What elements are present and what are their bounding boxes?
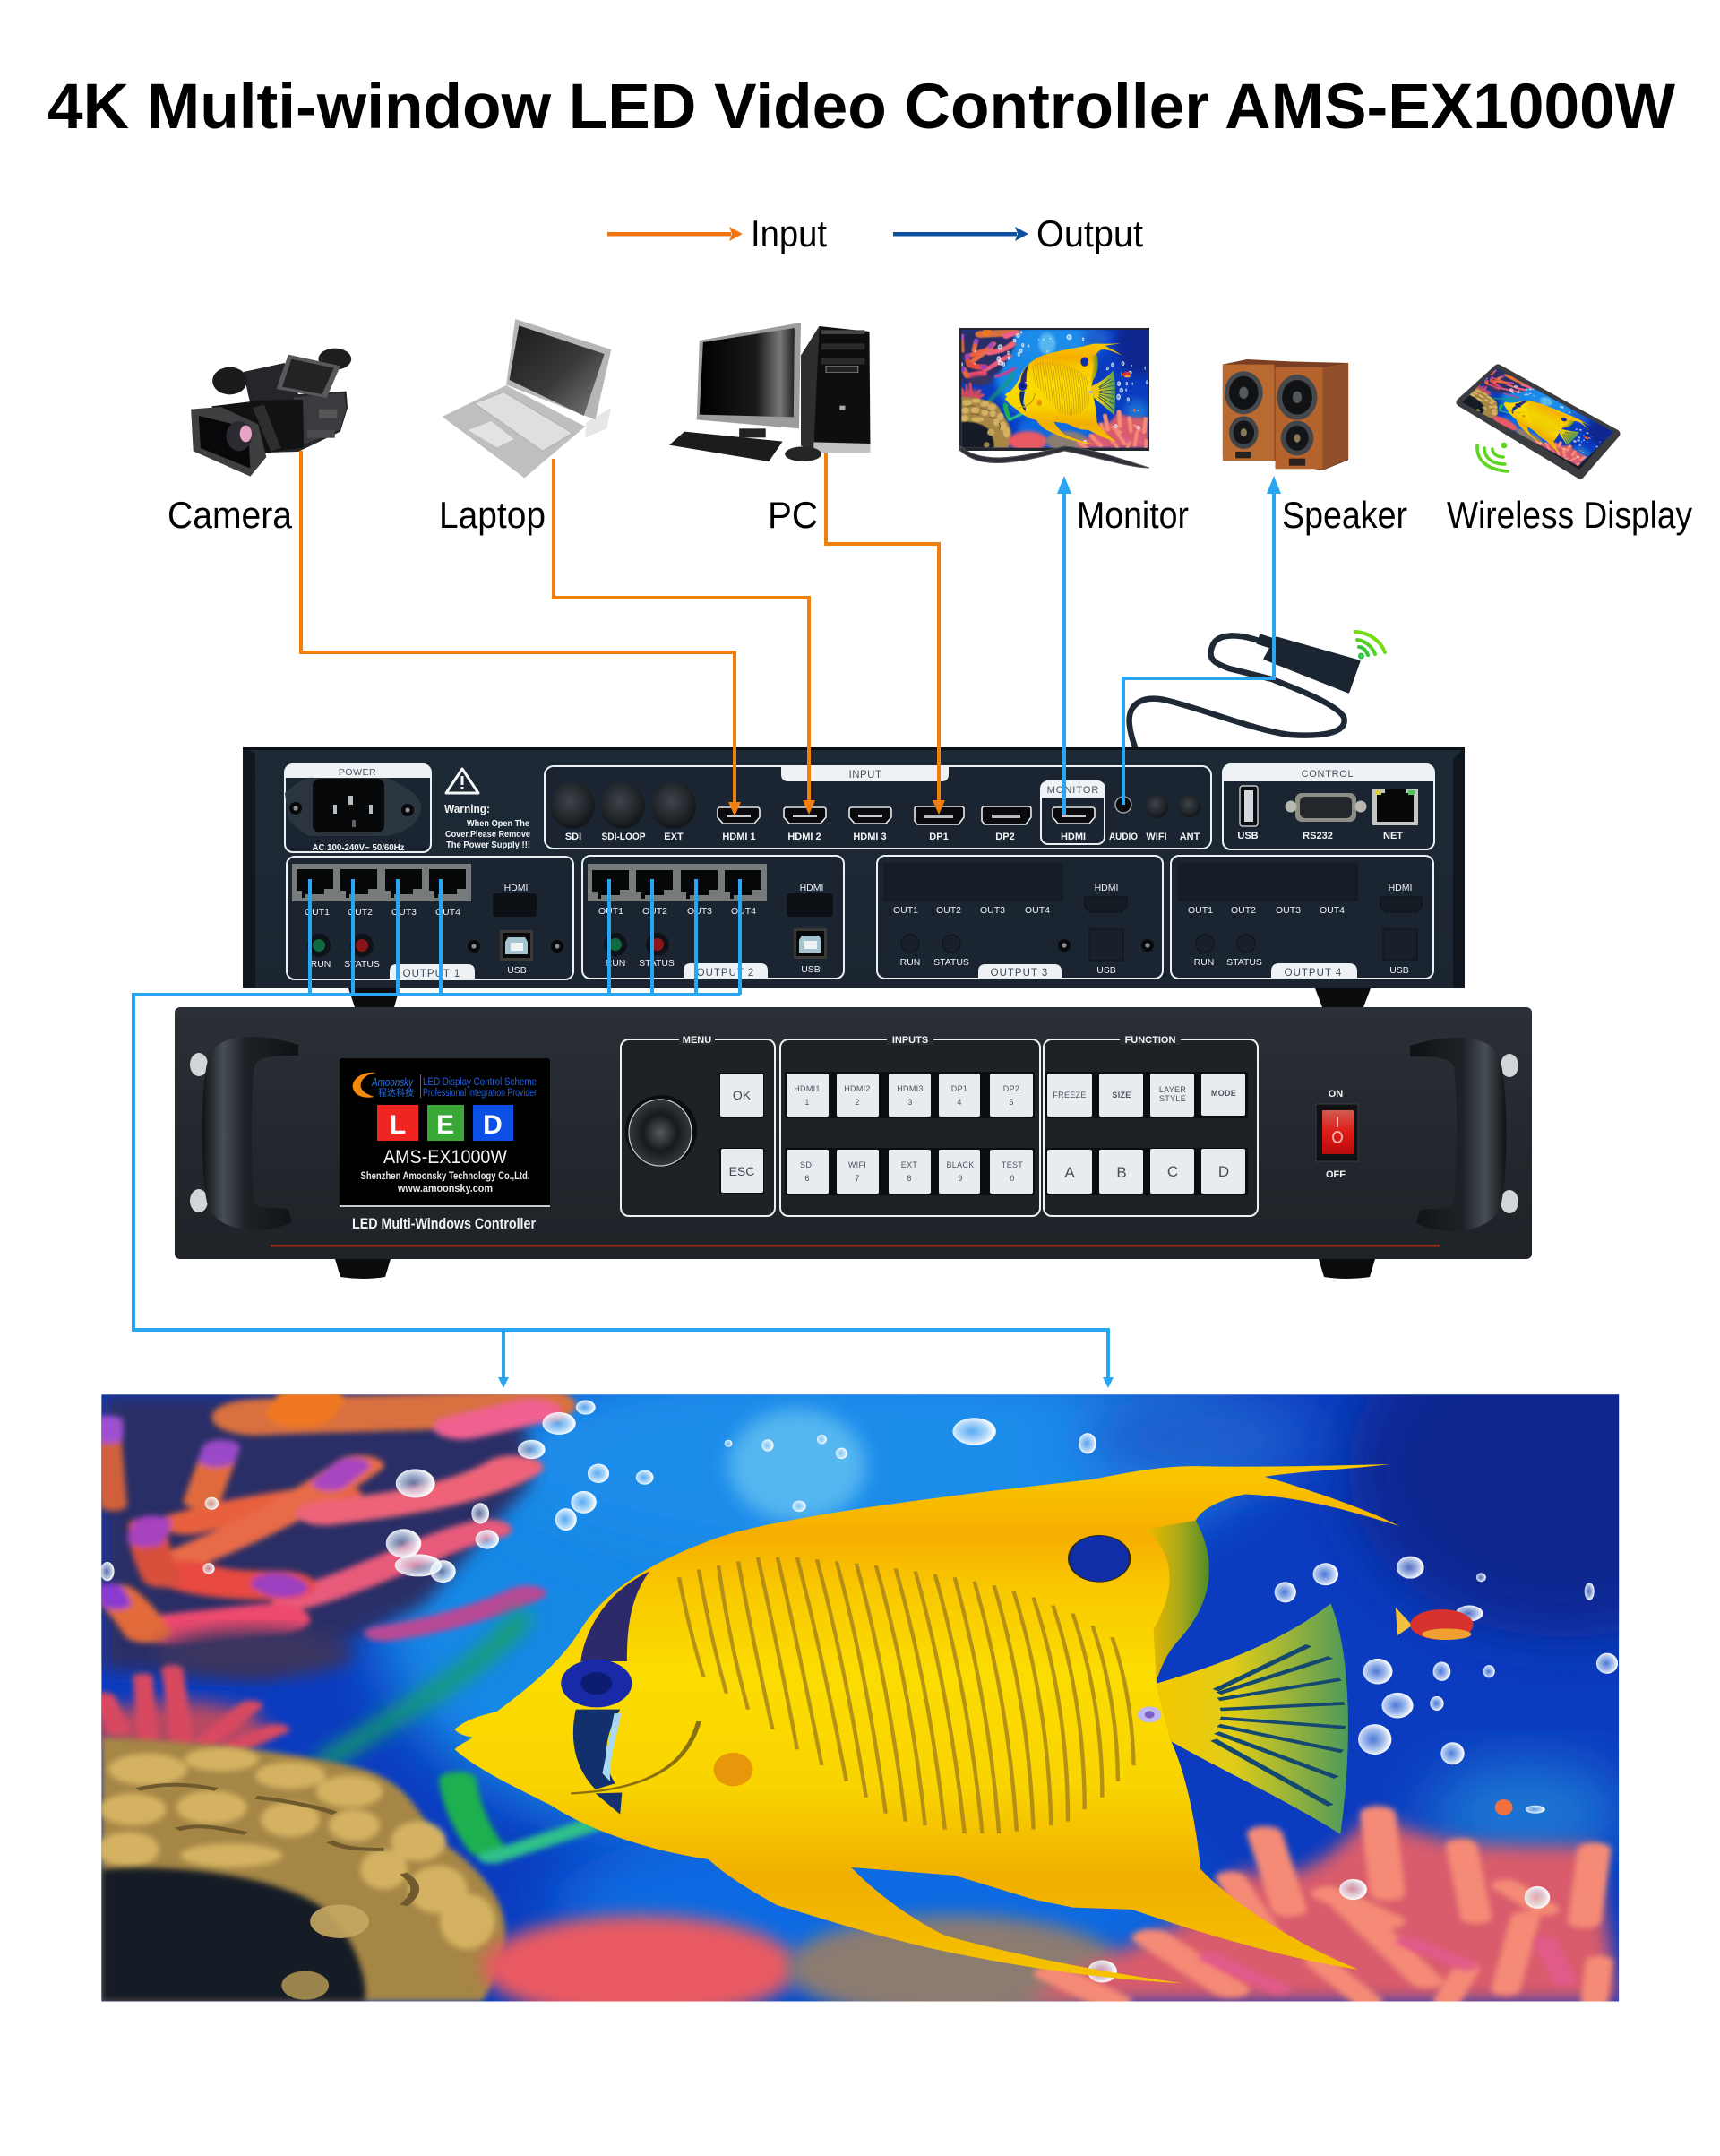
control knob xyxy=(625,1095,697,1167)
panel: input: DP2 xyxy=(995,832,1015,842)
LCD screen: Amoonsky xyxy=(371,1075,414,1089)
panel: inputs: 2 xyxy=(855,1098,860,1107)
power switch: ON xyxy=(1329,1089,1343,1100)
panel: output 4: HDMI xyxy=(1389,883,1412,893)
panel: menu xyxy=(621,1032,775,1216)
title: 4K Multi-window LED Video Controller AMS-EX1000W xyxy=(47,72,1675,142)
panel: output 2: OUT3 xyxy=(687,906,712,917)
rear panel of controller xyxy=(243,747,1465,1009)
green seaweed xyxy=(325,1617,596,1858)
panel: inputs: WIFI xyxy=(848,1160,866,1169)
warning triangle and text: Cover,Please Remove xyxy=(445,830,530,840)
panel: input: EXT xyxy=(664,832,684,842)
device labels xyxy=(168,494,1692,536)
panel: output 1: STATUS xyxy=(344,959,380,970)
LCD screen: Shenzhen Amoonsky Technology Co.,Ltd. xyxy=(360,1169,530,1182)
dorsal fin green edge xyxy=(1147,1521,1209,1681)
panel: output 2: USB xyxy=(801,964,821,975)
panel: input: ANT xyxy=(1180,832,1200,842)
panel: output 3: OUT3 xyxy=(980,905,1005,916)
panel: output 3: HDMI xyxy=(1095,883,1118,893)
panel: output 2: RUN xyxy=(606,958,625,969)
LED letter tiles: E xyxy=(436,1110,454,1140)
arrow: audio and wifi to speaker xyxy=(1123,476,1281,805)
panel: function: FREEZE xyxy=(1053,1091,1087,1100)
panel: power: POWER xyxy=(339,767,376,778)
arrows: output ports to LED wall xyxy=(133,879,1114,1388)
LCD screen: AMS-EX1000W xyxy=(383,1147,507,1168)
panel: inputs: SDI xyxy=(800,1160,814,1169)
label: PC: PC xyxy=(768,494,818,536)
panel: function: MODE xyxy=(1211,1089,1236,1098)
warning triangle and text: Warning: xyxy=(444,802,490,815)
panel: control: RS232 xyxy=(1303,831,1333,841)
arrow: laptop to HDMI 2 xyxy=(554,459,815,815)
panel: inputs: 0 xyxy=(1010,1174,1015,1183)
arrow: PC to DP1 xyxy=(826,453,945,815)
LED wall image: tropical fish scene xyxy=(101,1394,1620,2002)
label: laptop: Laptop xyxy=(439,494,546,536)
icon: PC xyxy=(669,323,871,461)
small red fish xyxy=(1396,1608,1474,1640)
panel: output 1: HDMI xyxy=(504,883,528,893)
panel: output 1: OUTPUT 1 xyxy=(403,969,460,979)
panel: inputs: INPUTS xyxy=(892,1035,928,1046)
panel: output 1 xyxy=(287,857,573,979)
front panel of controller xyxy=(175,1007,1532,1279)
panel: input xyxy=(545,766,1211,849)
LCD screen: www.amoonsky.com xyxy=(397,1184,493,1194)
LCD screen xyxy=(340,1058,550,1207)
panel: input: HDMI 2 xyxy=(787,832,821,842)
warning triangle and text: The Power Supply !!! xyxy=(446,841,530,850)
panel: output 3: OUT1 xyxy=(893,905,918,916)
icon: speakers xyxy=(1223,359,1348,470)
panel: output 3: OUT2 xyxy=(936,905,961,916)
panel: output 1: OUT4 xyxy=(435,907,460,918)
panel: power: AC 100-240V~ 50/60Hz xyxy=(312,842,405,853)
panel: output 3: RUN xyxy=(900,957,920,968)
label: monitor: Monitor xyxy=(1077,494,1189,536)
panel: function: C xyxy=(1167,1163,1178,1180)
feet of front unit xyxy=(335,1259,1375,1279)
coral upper left xyxy=(101,1394,531,1677)
panel: output 2: STATUS xyxy=(639,958,675,969)
panel: inputs: HDMI1 xyxy=(794,1084,821,1093)
panel: input: DP1 xyxy=(929,832,949,842)
icon: camera xyxy=(191,349,351,477)
LED letter tiles: L xyxy=(390,1110,406,1140)
coral bottom xyxy=(482,1814,1619,2020)
panel: function: SIZE xyxy=(1112,1091,1131,1100)
panel: inputs: HDMI3 xyxy=(897,1084,924,1093)
panel: output 1: RUN xyxy=(311,959,331,970)
panel: output 4: OUT3 xyxy=(1276,905,1301,916)
panel: output 4: OUT4 xyxy=(1320,905,1345,916)
legend: output label: Output xyxy=(1036,212,1143,254)
panel: inputs: 4 xyxy=(957,1098,962,1107)
panel: output 2: HDMI xyxy=(800,883,823,893)
panel: inputs: BLACK xyxy=(946,1160,975,1169)
legend: output arrow xyxy=(893,227,1028,241)
monitor sub-panel: MONITOR xyxy=(1047,785,1099,796)
monitor sub-panel xyxy=(1041,781,1105,844)
arrow: monitor HDMI to monitor xyxy=(1057,476,1071,815)
panel: inputs: 3 xyxy=(907,1098,913,1107)
LED letter tiles xyxy=(377,1105,513,1141)
panel: input: HDMI 1 xyxy=(722,832,756,842)
panel: output 4: USB xyxy=(1389,965,1409,976)
panel: output 2: OUT1 xyxy=(598,906,624,917)
yellow fish xyxy=(455,1464,1399,1983)
panel: input: INPUT xyxy=(849,770,882,780)
panel: inputs: 6 xyxy=(804,1174,810,1183)
legend: input and output arrows xyxy=(607,212,1143,254)
panel: inputs: 7 xyxy=(855,1174,860,1183)
icon: phone with wireless display xyxy=(1459,362,1631,475)
panel: function: A xyxy=(1064,1164,1075,1181)
icon: monitor xyxy=(959,312,1169,468)
panel: output 3 xyxy=(877,856,1163,979)
stripes xyxy=(679,1557,1134,1833)
power switch: OFF xyxy=(1326,1169,1346,1180)
panel: menu: MENU xyxy=(683,1035,711,1046)
panel: input: WIFI xyxy=(1146,832,1167,842)
panel: inputs: 5 xyxy=(1009,1098,1014,1107)
panel: output 4: OUT1 xyxy=(1188,905,1213,916)
legend: input arrow xyxy=(607,227,743,241)
panel: output 3: USB xyxy=(1096,965,1116,976)
arrow: camera to HDMI 1 xyxy=(301,451,741,816)
panel: function: FUNCTION xyxy=(1125,1035,1175,1046)
water background xyxy=(101,1301,1720,2001)
panel: output 1: OUT2 xyxy=(348,907,373,918)
monitor sub-panel: HDMI xyxy=(1061,832,1086,842)
panel: input: SDI xyxy=(565,832,581,842)
warning triangle and text: When Open The xyxy=(467,819,529,829)
panel: inputs: 9 xyxy=(958,1174,963,1183)
panel: function xyxy=(1044,1032,1258,1216)
panel: control: USB xyxy=(1237,831,1259,841)
panel: function: D xyxy=(1218,1163,1229,1180)
face bands and eye xyxy=(580,1572,649,1661)
panel: output 3: OUTPUT 3 xyxy=(991,968,1048,979)
left handle xyxy=(190,1037,298,1230)
input connection lines (orange) xyxy=(301,451,945,816)
icon: wifi signal xyxy=(1355,632,1385,658)
label: wireless display: Wireless Display xyxy=(1447,494,1692,536)
panel: output 4: STATUS xyxy=(1226,957,1262,968)
panel: menu: OK xyxy=(733,1088,752,1102)
icon: Amoonsky logo xyxy=(353,1073,376,1098)
LCD screen: 程达科技 xyxy=(378,1087,414,1099)
bubbles xyxy=(100,1401,1618,1983)
panel: output 1: USB xyxy=(507,965,527,976)
feet of rear unit xyxy=(348,988,1371,1009)
panel: input: HDMI 3 xyxy=(853,832,887,842)
model caption: LED Multi-Windows Controller xyxy=(352,1215,536,1232)
panel: output 2: OUT2 xyxy=(642,906,667,917)
panel: inputs: HDMI2 xyxy=(844,1084,871,1093)
panel: control xyxy=(1223,764,1434,849)
right handle xyxy=(1410,1038,1518,1231)
panel: power xyxy=(285,764,431,853)
label: camera: Camera xyxy=(168,494,293,536)
panel: inputs: DP2 xyxy=(1003,1084,1019,1093)
output connection lines (blue) xyxy=(133,476,1281,1388)
LCD screen: Professional Integration Provider xyxy=(423,1088,537,1099)
panel: control: CONTROL xyxy=(1302,769,1354,780)
panel: control: NET xyxy=(1383,831,1403,841)
panel: inputs: DP1 xyxy=(951,1084,968,1093)
red accent line xyxy=(271,1245,1440,1247)
panel: output 1: OUT1 xyxy=(305,907,330,918)
panel: inputs: 8 xyxy=(907,1174,912,1183)
legend: input label: Input xyxy=(751,212,827,254)
panel: output 4: OUTPUT 4 xyxy=(1285,968,1342,979)
panel: inputs: EXT xyxy=(901,1160,917,1169)
panel: function: LAYER xyxy=(1159,1085,1186,1094)
panel: input: SDI-LOOP xyxy=(602,832,645,842)
icon: green wifi waves xyxy=(1477,444,1508,471)
tail fin xyxy=(1157,1603,1348,1834)
panel: output 2: OUT4 xyxy=(731,906,756,917)
LED letter tiles: D xyxy=(483,1110,503,1140)
power switch xyxy=(1316,1089,1358,1180)
panel: inputs: TEST xyxy=(1002,1160,1023,1169)
panel: output 2 xyxy=(582,856,844,979)
panel: menu: ESC xyxy=(729,1164,754,1178)
panel: input: AUDIO xyxy=(1109,832,1138,842)
panel: output 3: OUT4 xyxy=(1025,905,1050,916)
body xyxy=(455,1464,1399,1983)
panel: output 4: OUT2 xyxy=(1231,905,1256,916)
panel: inputs: 1 xyxy=(804,1098,810,1107)
warning triangle and text xyxy=(444,769,530,850)
panel: inputs xyxy=(780,1032,1040,1216)
label: speaker: Speaker xyxy=(1282,494,1407,536)
coral lower left xyxy=(89,1669,505,2001)
wifi dongle with cable xyxy=(1130,632,1385,802)
panel: output 1: OUT3 xyxy=(391,907,417,918)
panel: output 4: RUN xyxy=(1194,957,1214,968)
panel: output 3: STATUS xyxy=(933,957,969,968)
panel: function: STYLE xyxy=(1159,1094,1186,1103)
panel: output 4 xyxy=(1171,856,1433,979)
dorsal spot xyxy=(1069,1535,1130,1582)
panel: function: B xyxy=(1116,1164,1127,1181)
icon: laptop xyxy=(443,319,611,478)
panel: output 2: OUTPUT 2 xyxy=(697,968,754,979)
LCD screen: LED Display Control Scheme xyxy=(423,1077,537,1088)
